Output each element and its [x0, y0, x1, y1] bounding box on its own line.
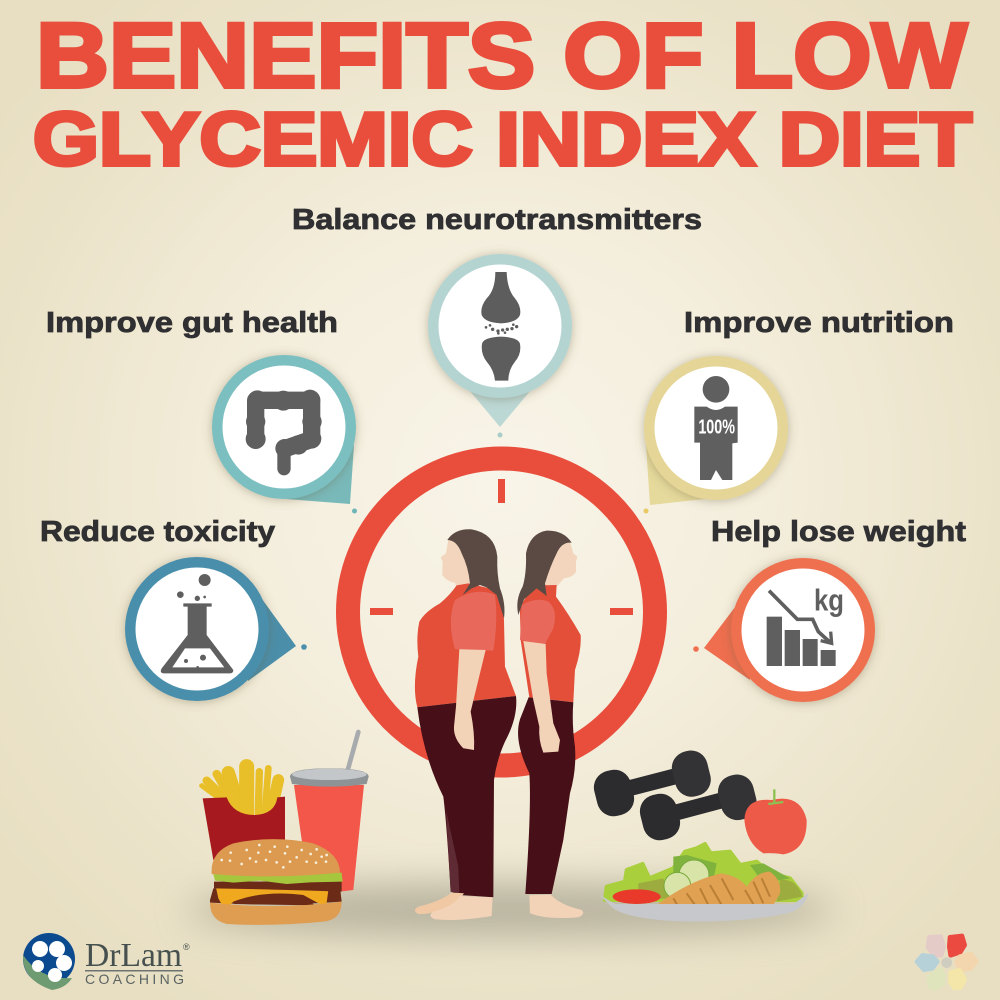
heading: reduce toxicity: Reduce toxicity [40, 516, 275, 548]
title line 1: BENEFITS OF LOW [36, 5, 967, 107]
pin: improve gut health [212, 355, 357, 514]
pin: improve nutrition [644, 356, 788, 514]
icon: synapse [481, 272, 520, 381]
icon: flask [161, 574, 233, 673]
pin: reduce toxicity [125, 557, 307, 701]
apple [744, 789, 807, 854]
logo tagline: COACHING [85, 971, 184, 987]
title [33, 5, 972, 181]
heading: improve nutrition: Improve nutrition [684, 307, 954, 339]
logo: flower mark [917, 936, 976, 989]
figure: heavier woman [415, 529, 516, 920]
icon: weight chart: kg [814, 584, 844, 618]
salad plate [598, 844, 808, 922]
heading: help lose weight: Help lose weight [711, 516, 966, 548]
icon: intestine [246, 390, 322, 469]
title line 2: GLYCEMIC INDEX DIET [33, 97, 972, 181]
dumbbells [590, 747, 760, 844]
pin: balance neurotransmitters [428, 254, 572, 438]
ground shadow [185, 883, 835, 937]
figure: slimmer woman [517, 531, 583, 918]
drink cup [290, 732, 369, 892]
burger [210, 839, 343, 925]
heading: improve gut health: Improve gut health [46, 307, 338, 339]
icon: weight chart [767, 584, 844, 666]
logo mark [23, 933, 75, 990]
pin: help lose weight [693, 558, 875, 702]
illustration: fast food [202, 732, 369, 925]
icon: person 100%: 100% [698, 416, 735, 438]
labels group [40, 204, 966, 548]
logo: DrLam Coaching [23, 933, 190, 990]
illustration: healthy items [590, 747, 808, 922]
icon: person 100% [694, 376, 738, 480]
heading: balance neurotransmitters: Balance neurotransmitters [292, 204, 702, 236]
logo: DrLam Coaching: ® [183, 942, 190, 952]
logo wordmark: DrLam [85, 937, 182, 974]
fries [202, 767, 285, 860]
clock ring [348, 458, 655, 766]
